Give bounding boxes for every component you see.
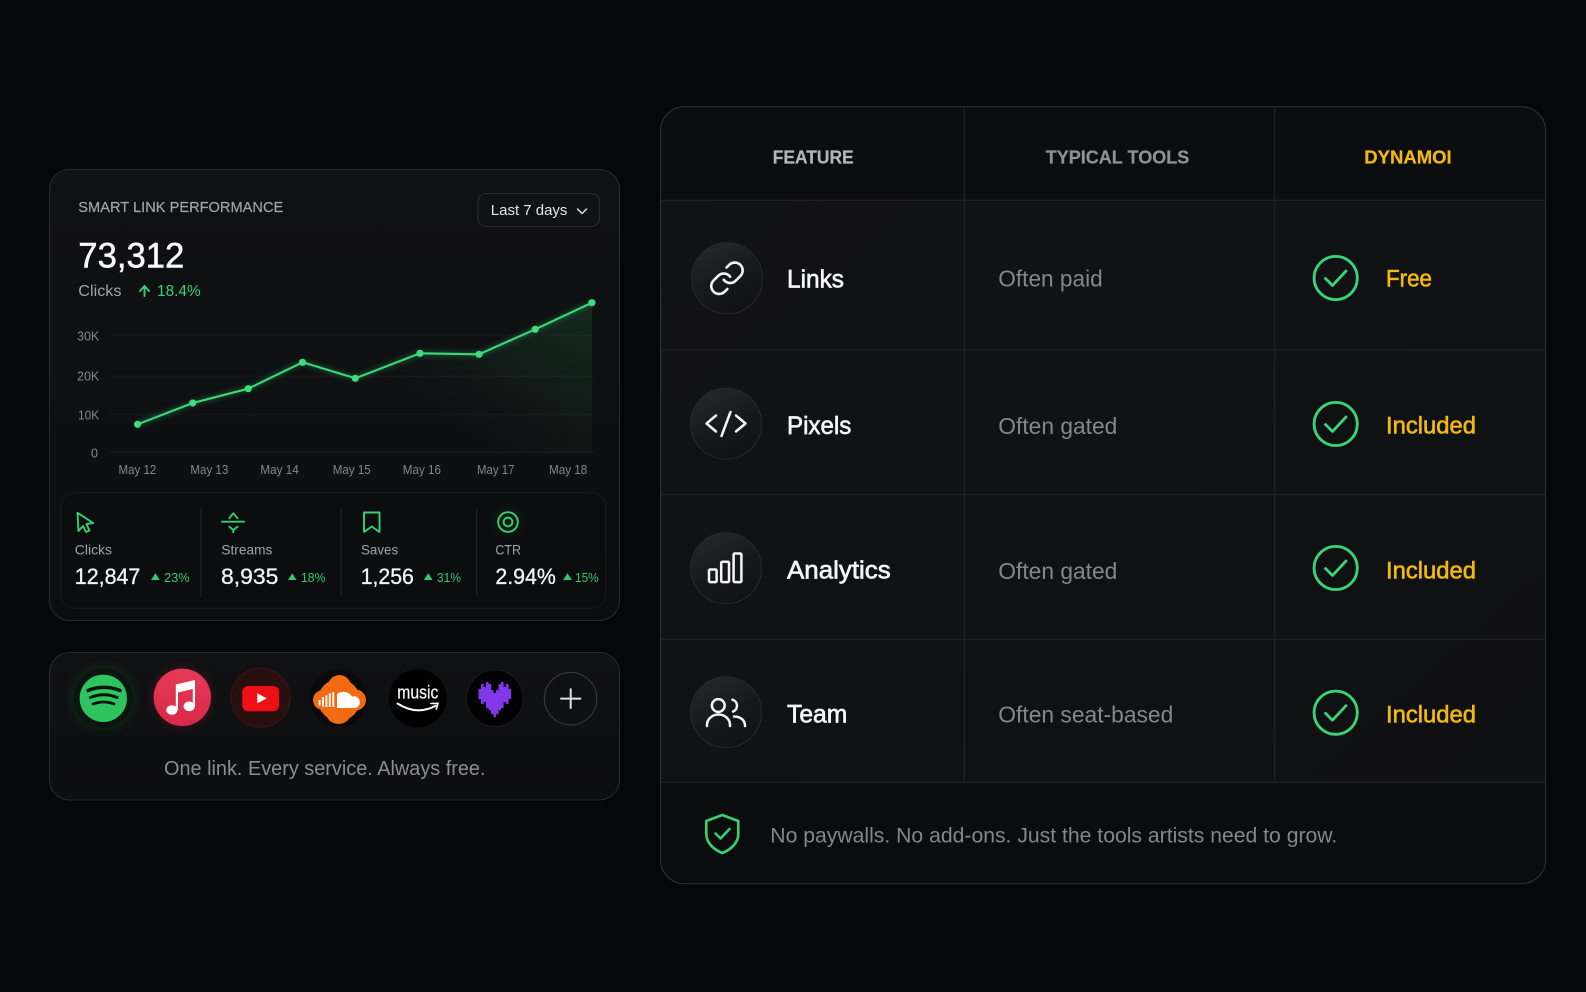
stat: streams (221, 513, 326, 589)
column heading: dynamoi: DYNAMOI (1364, 147, 1452, 167)
column heading: typical tools: TYPICAL TOOLS (1046, 147, 1189, 167)
row: links: Links (787, 265, 844, 293)
row: team (690, 677, 1476, 748)
line chart: clicks over time: 30K (77, 329, 100, 343)
row: team: Often seat-based (998, 701, 1173, 727)
status: included (1314, 546, 1476, 590)
row: pixels: Often gated (998, 413, 1117, 439)
row: analytics (690, 533, 1476, 604)
stat: click-through rate (494, 508, 599, 589)
heading: smart link performance: SMART LINK PERFORMANCE (78, 199, 283, 216)
line chart: clicks over time: 20K (77, 370, 100, 384)
icon: link (692, 243, 762, 314)
stat: saves: 1,256 (361, 564, 414, 589)
icon: soundcloud (310, 670, 367, 727)
panel: feature comparison table (661, 107, 1546, 884)
status: included: Included (1386, 701, 1476, 728)
icon: shield (706, 815, 738, 853)
stat: saves: Saves (361, 542, 398, 558)
icon: code (690, 388, 762, 459)
status: included (1314, 691, 1476, 734)
tagline: One link. Every service. Always free. (164, 758, 486, 780)
icon: bar chart (690, 533, 762, 604)
dropdown: date range: Last 7 days (491, 202, 567, 219)
line chart: clicks over time: May 16 (403, 463, 441, 477)
dropdown: date range (478, 194, 600, 226)
panel: smart link performance (50, 170, 620, 620)
line chart: clicks over time: May 13 (190, 463, 228, 477)
stat: streams: 8,935 (221, 564, 278, 589)
footer note: No paywalls. No add-ons. Just the tools artists need to grow. (770, 824, 1337, 848)
row: analytics: Analytics (787, 556, 891, 584)
footer note (706, 815, 1337, 853)
row: links: Often paid (998, 266, 1103, 292)
line chart: clicks over time: May 15 (333, 463, 371, 477)
icon: people (690, 677, 762, 748)
line chart: clicks over time: May 17 (477, 463, 515, 477)
icon: apple music (153, 668, 211, 726)
row: links (692, 243, 1432, 314)
row: pixels: Pixels (787, 412, 851, 440)
stat: saves (361, 512, 461, 589)
icon: amazon music: music (397, 682, 438, 702)
status: included: Included (1386, 557, 1476, 584)
icon: youtube (231, 668, 290, 727)
stat: saves: 31% (437, 570, 461, 585)
icon: purple audio heart (466, 670, 523, 727)
stat: click-through rate: 15% (575, 570, 599, 585)
line chart: clicks over time: 0 (91, 446, 98, 460)
stat: streams: Streams (221, 542, 272, 558)
status: included (1314, 402, 1476, 446)
line chart: clicks over time: May 12 (118, 463, 156, 477)
status: free (1314, 256, 1432, 300)
icon: amazon music (389, 669, 447, 727)
row: team: Team (787, 701, 847, 729)
clicks label: Clicks (78, 283, 122, 300)
stat: click-through rate: CTR (495, 542, 521, 558)
stat: clicks: 23% (164, 570, 190, 585)
panel: streaming services (50, 652, 620, 800)
row: analytics: Often gated (998, 558, 1117, 584)
line chart: clicks over time (77, 299, 596, 477)
clicks change: 18.4% (157, 283, 201, 300)
icon: add service (544, 672, 597, 725)
status: free: Free (1386, 266, 1432, 293)
stat: streams: 18% (301, 570, 326, 585)
line chart: clicks over time: May 18 (549, 463, 587, 477)
stat: clicks: Clicks (75, 542, 112, 558)
row: pixels (690, 388, 1476, 459)
stat: click-through rate: 2.94% (495, 564, 556, 589)
stat: clicks (75, 513, 190, 589)
status: included: Included (1386, 413, 1476, 440)
icon: spotify (71, 666, 135, 730)
stat: clicks: 12,847 (75, 564, 140, 589)
column heading: feature: FEATURE (773, 147, 854, 167)
panel: metric stats (61, 493, 606, 608)
line chart: clicks over time: 10K (78, 408, 100, 422)
line chart: clicks over time: May 14 (260, 463, 299, 477)
total clicks number: 73,312 (78, 236, 184, 275)
